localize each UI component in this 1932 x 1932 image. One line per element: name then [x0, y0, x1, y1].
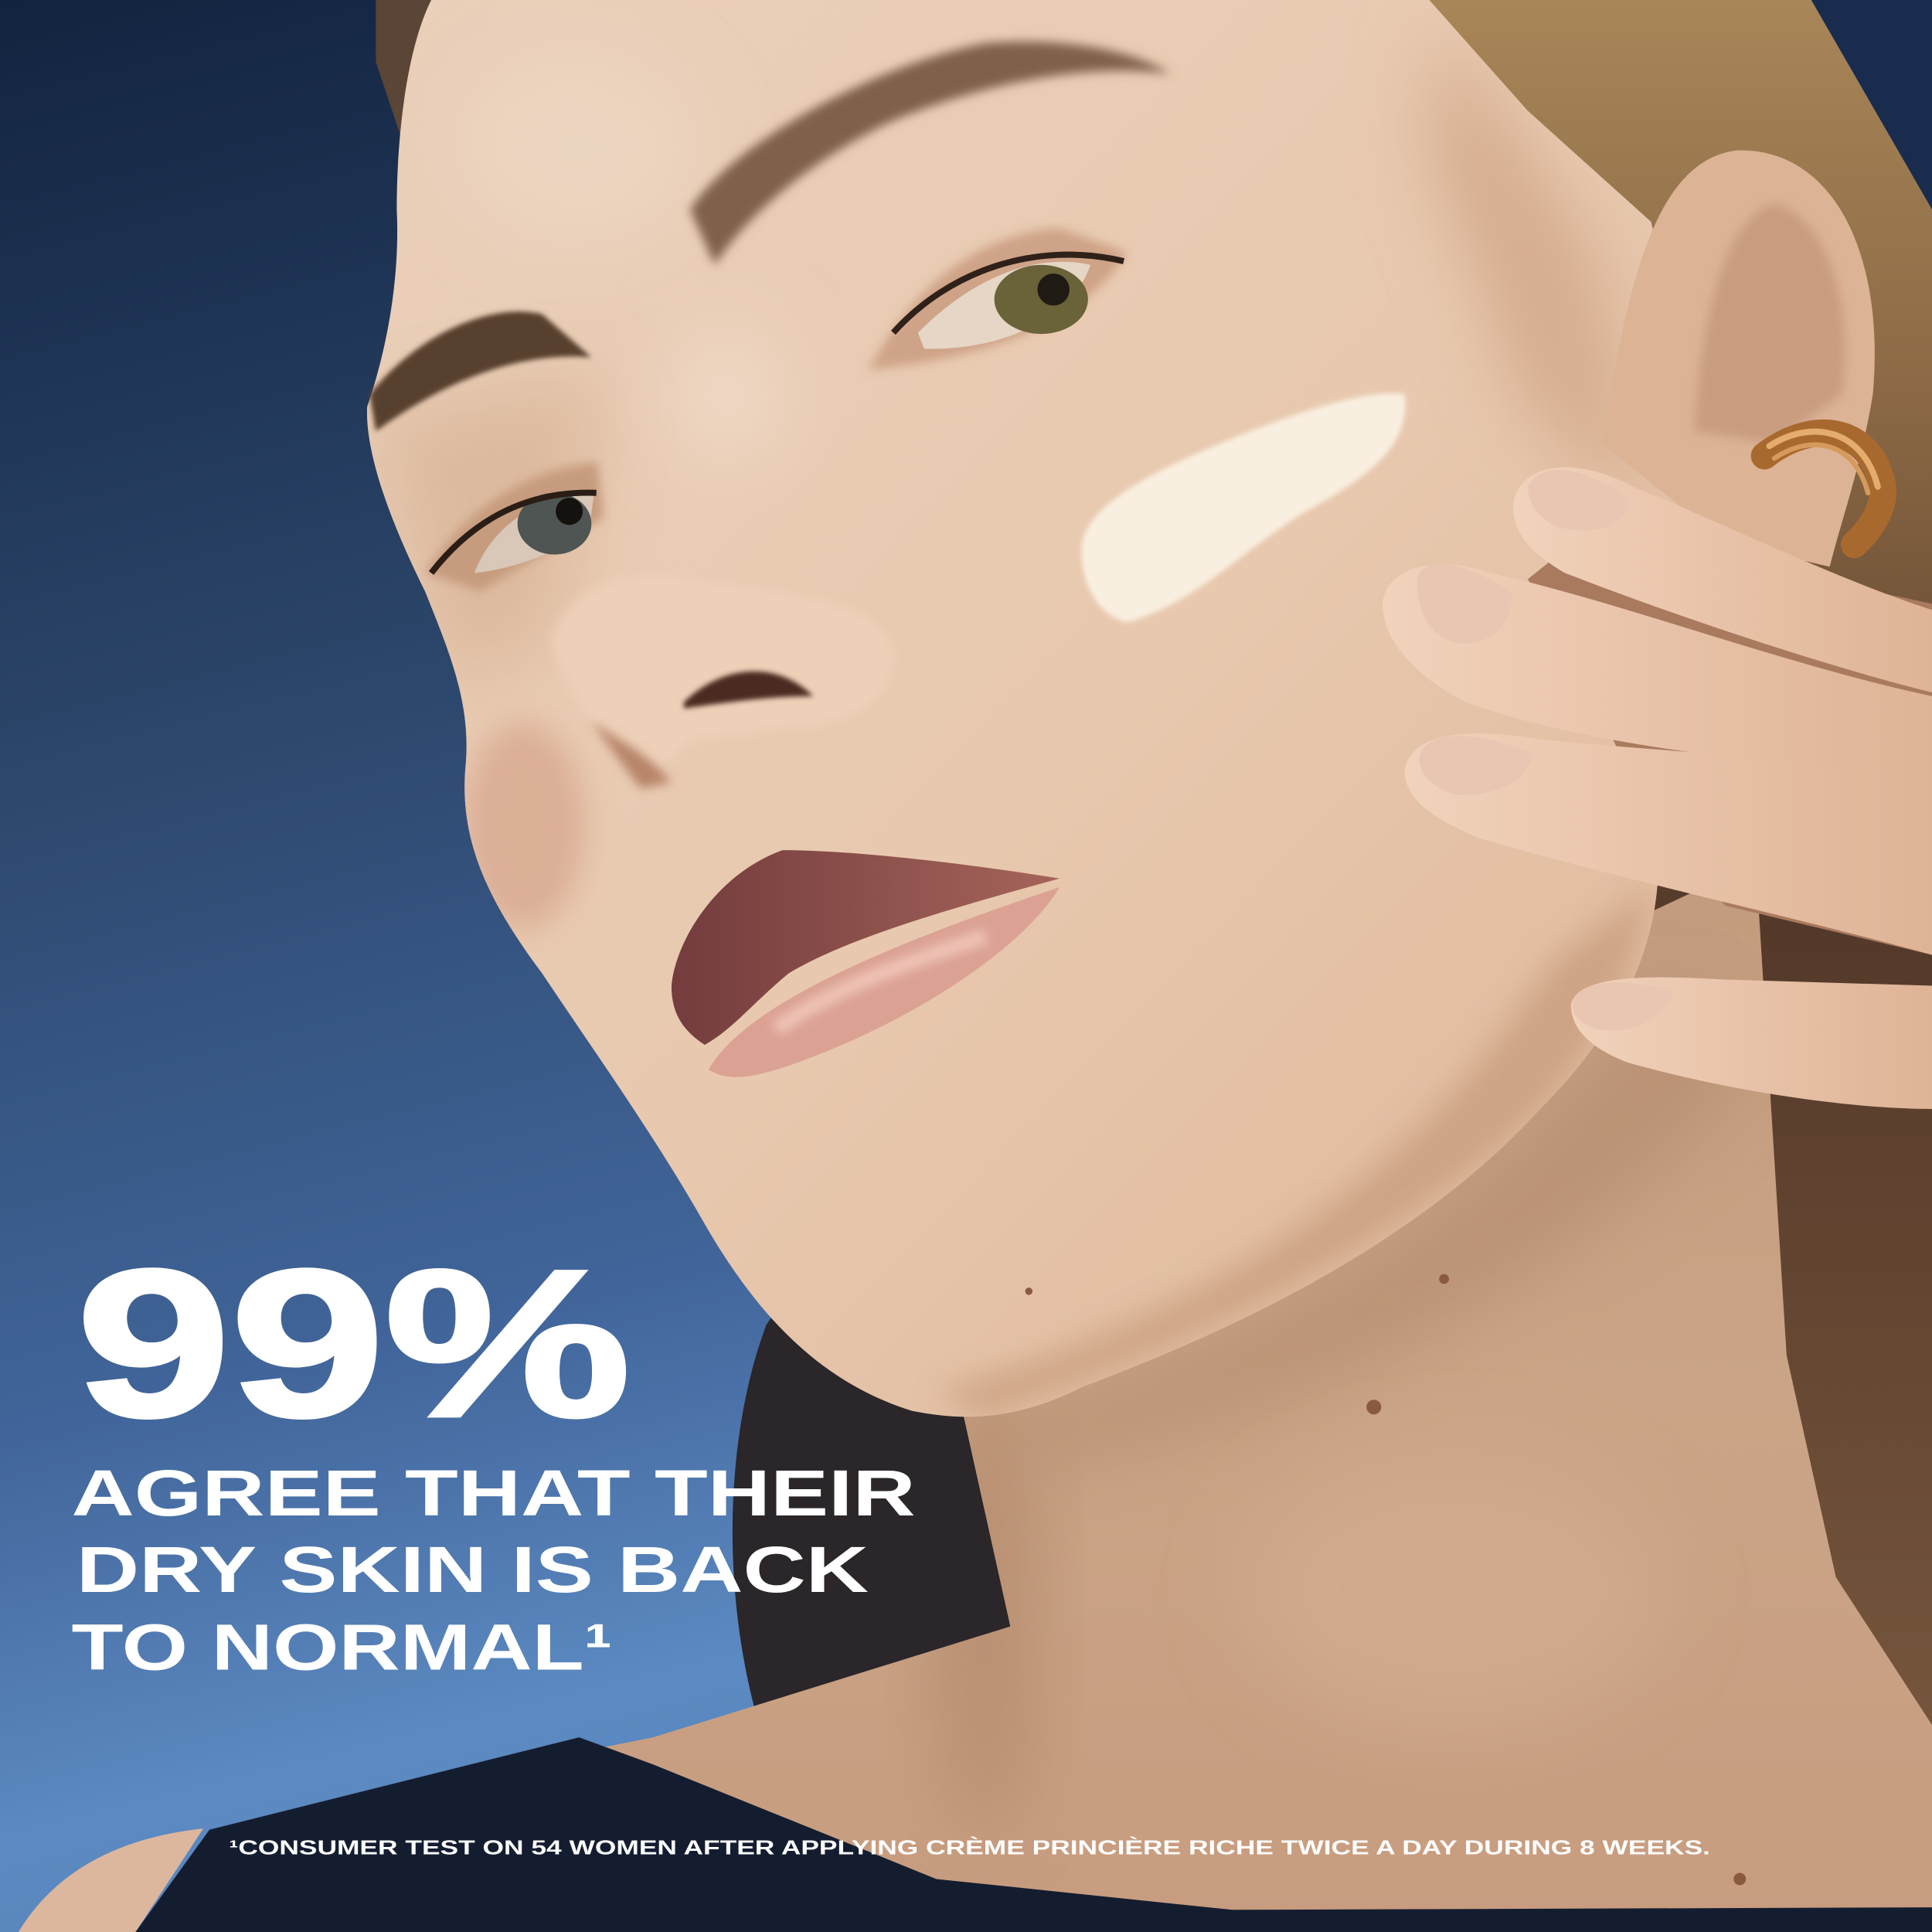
hair top left	[376, 0, 434, 135]
left eye socket shade	[369, 369, 604, 690]
footnote: ¹CONSUMER TEST ON 54 WOMEN AFTER APPLYING CRÈME PRINCIÈRE RICHE TWICE A DAY DURING 8 WEEKS.	[230, 1837, 1710, 1859]
temple shade	[1429, 25, 1651, 518]
right eye	[869, 228, 1128, 369]
left shoulder	[19, 1828, 203, 1932]
ear	[1602, 150, 1875, 566]
neck	[591, 850, 1932, 1932]
under jaw shade	[1040, 1059, 1716, 1461]
nose	[551, 576, 893, 788]
lips	[672, 850, 1060, 1077]
hair behind neck	[733, 1294, 1010, 1706]
jaw shadow	[937, 887, 1651, 1417]
shadow between fingers	[1528, 530, 1932, 955]
finger 2	[1383, 564, 1932, 779]
nose bridge highlight	[675, 338, 779, 452]
finger 4	[1571, 978, 1932, 1109]
chest light	[1287, 1529, 1621, 1699]
moles on neck	[1026, 1274, 1746, 1885]
finger 1	[1513, 468, 1932, 692]
headline body text: TO NORMAL¹	[71, 1611, 612, 1683]
cheek blush	[462, 721, 585, 930]
dark top garment	[135, 1737, 1932, 1932]
headline body text: AGREE THAT THEIR	[71, 1457, 916, 1529]
top right dark background corner	[1799, 0, 1932, 209]
neck left shade	[937, 1368, 1035, 1836]
headline stat: 99%	[77, 1227, 631, 1461]
fingers	[1383, 468, 1932, 1109]
hair behind right	[1429, 0, 1932, 1849]
upper eyebrow right	[690, 42, 1171, 265]
fingernails	[1417, 470, 1673, 1030]
left eye	[425, 462, 604, 591]
finger 3	[1405, 733, 1932, 955]
headline body text	[71, 1457, 916, 1683]
gold ear ring	[1764, 432, 1883, 545]
forehead highlight	[456, 49, 702, 247]
headline body text: DRY SKIN IS BACK	[77, 1533, 869, 1606]
cream swatch	[1081, 393, 1405, 622]
face	[357, 0, 1737, 1429]
eyebrow left	[369, 311, 591, 431]
